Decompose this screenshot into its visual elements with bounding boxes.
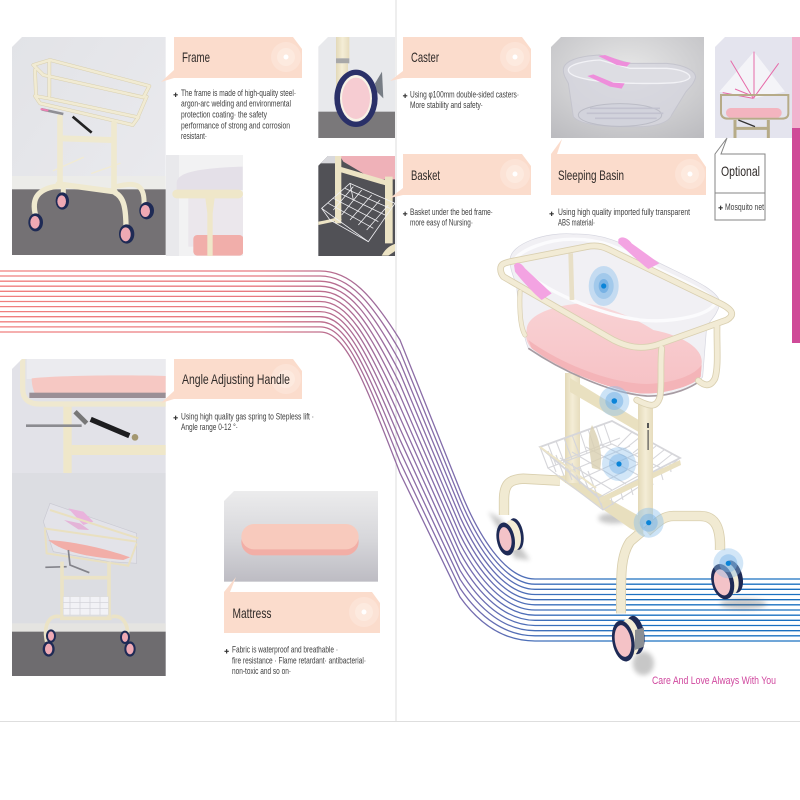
text: Basket description: ✚ bbox=[402, 211, 408, 218]
right wheel bbox=[707, 558, 746, 602]
photo: angle adjusting handle bbox=[12, 359, 166, 474]
text: Mattress description: ✚ bbox=[224, 648, 229, 656]
callout: Caster bbox=[390, 37, 531, 81]
base tube legs outline bbox=[504, 479, 720, 613]
callout: Frame: Frame bbox=[182, 49, 210, 65]
text: Basket description: more easy of Nursing· bbox=[410, 218, 473, 228]
colour strip at right edge bbox=[792, 37, 800, 343]
front wheel bbox=[609, 615, 647, 663]
callout: Basket: Basket bbox=[411, 167, 440, 183]
text: Sleeping Basin description: ABS material· bbox=[558, 218, 595, 228]
callout: Frame bbox=[161, 37, 302, 82]
text: Frame description: performance of strong and corrosion bbox=[181, 120, 290, 130]
callout: Mattress: Mattress bbox=[232, 605, 272, 621]
callout: Angle Adjusting Handle bbox=[161, 359, 302, 403]
main product: bassinet stand and wheels bbox=[488, 475, 767, 675]
mattress bbox=[526, 303, 702, 394]
photo: mattress bbox=[224, 491, 378, 582]
text: Mattress description bbox=[224, 645, 366, 676]
photo: frame detail bbox=[166, 153, 243, 257]
text: Sleeping Basin description: ✚ bbox=[549, 211, 554, 218]
pink handles bbox=[514, 263, 552, 300]
text: Caster description: ✚ bbox=[402, 93, 408, 100]
text: Caster description: Using φ100mm double-sided casters· bbox=[410, 89, 519, 99]
photo: bassinet frame bbox=[12, 37, 166, 257]
left wheel bbox=[494, 517, 526, 557]
callout: Optional mosquito net: ✚ bbox=[718, 205, 723, 212]
text: Angle handle description: Angle range 0-12 °· bbox=[181, 422, 238, 432]
callout: Optional mosquito net bbox=[715, 138, 765, 220]
text: Frame description: argon-arc welding and environmental bbox=[181, 99, 291, 109]
frame tube outline bbox=[501, 246, 732, 405]
callout: Optional mosquito net: Optional bbox=[721, 163, 760, 179]
base tube legs bbox=[504, 479, 720, 613]
wheel shadows bbox=[488, 512, 767, 675]
main product: brand mark on column bbox=[647, 423, 649, 450]
hotspot: basin bbox=[589, 266, 619, 306]
hotspot: base bbox=[634, 508, 664, 538]
back post bbox=[571, 253, 572, 300]
callout: Mattress bbox=[224, 577, 380, 633]
text: Frame description: The frame is made of high-quality steel· bbox=[181, 88, 296, 98]
main product: upright column and basket bbox=[540, 373, 681, 524]
text: Mattress description: fire resistance · Flame retardant· antibacterial· bbox=[232, 655, 366, 665]
hotspot: handle bbox=[599, 386, 629, 416]
text: Mattress description: non-toxic and so on· bbox=[232, 666, 291, 676]
hotspot: caster bbox=[713, 548, 743, 578]
photo: sleeping basin bbox=[551, 37, 705, 138]
text: Angle handle description: Using high quality gas spring to Stepless lift · bbox=[181, 411, 314, 421]
callout: Sleeping Basin: Sleeping Basin bbox=[558, 167, 624, 183]
callout: Caster: Caster bbox=[411, 49, 439, 65]
frame tubes bbox=[501, 246, 732, 405]
basin body bbox=[510, 234, 720, 396]
text: Basket description: Basket under the bed frame· bbox=[410, 207, 493, 217]
text: Angle handle description: ✚ bbox=[173, 415, 178, 422]
text: Caster description: More stability and safety· bbox=[410, 100, 483, 110]
text: Basket description bbox=[402, 207, 493, 228]
photo: tilted bassinet side view bbox=[12, 470, 166, 677]
text: Sleeping Basin description bbox=[549, 207, 690, 228]
text: Frame description bbox=[173, 88, 296, 141]
wire basket bbox=[540, 421, 680, 510]
photo: basket bbox=[318, 156, 397, 256]
text: Caster description bbox=[402, 89, 519, 110]
text: Mattress description: Fabric is waterproof and breathable · bbox=[232, 645, 338, 655]
photo: caster bbox=[318, 37, 397, 140]
photo: mosquito net option bbox=[715, 37, 792, 138]
text: Frame description: ✚ bbox=[173, 92, 178, 99]
callout: Angle Adjusting Handle: Angle Adjusting Handle bbox=[182, 371, 290, 387]
callout: Optional mosquito net: Mosquito net bbox=[725, 202, 764, 212]
main product: transparent basin bbox=[501, 234, 732, 405]
callout: Basket bbox=[390, 154, 531, 198]
base cross bar bbox=[557, 475, 643, 535]
text: Frame description: protection coating· the safety bbox=[181, 110, 267, 120]
hotspot: basket bbox=[602, 447, 636, 481]
text: Angle handle description bbox=[173, 411, 314, 432]
flowing gradient lines bbox=[0, 271, 800, 641]
text: Frame description: resistant· bbox=[181, 131, 207, 141]
text: Sleeping Basin description: Using high quality imported fully transparent bbox=[558, 207, 690, 217]
inner rim highlight bbox=[513, 239, 715, 321]
callout: Sleeping Basin bbox=[551, 139, 706, 195]
